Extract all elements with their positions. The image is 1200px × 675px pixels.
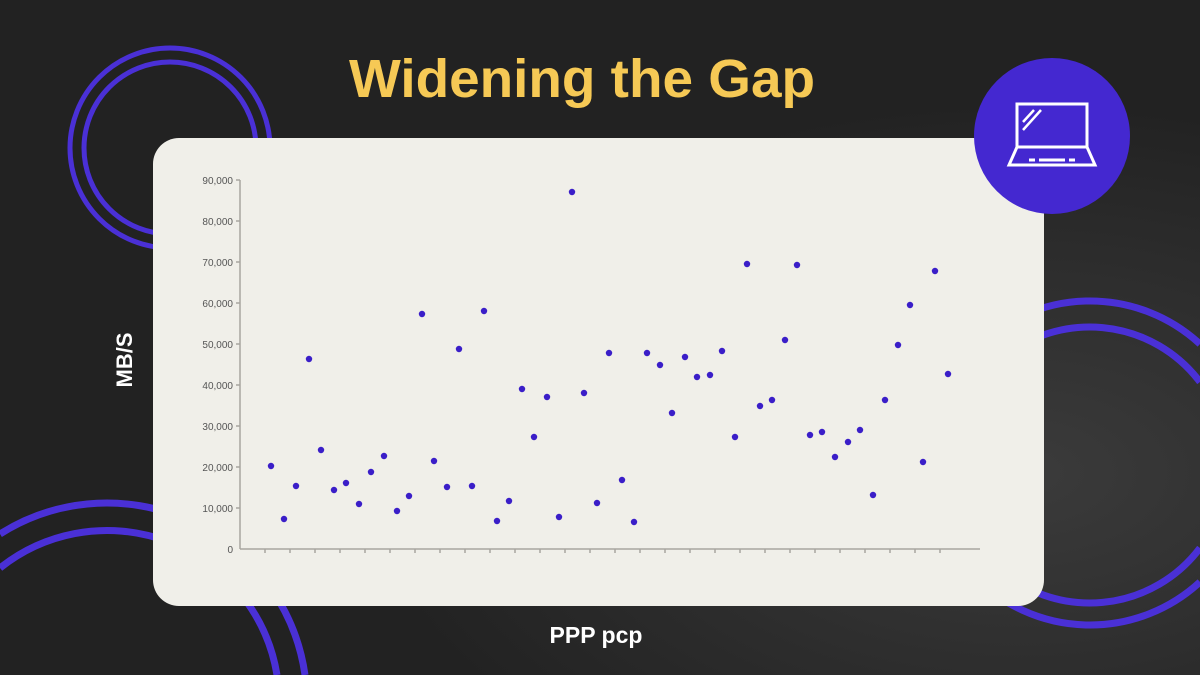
y axis label: MB/S [112, 332, 137, 388]
decorative rings: right [928, 301, 1200, 625]
scatter chart: 20,000 [202, 463, 233, 474]
decorative rings: bottom-left [0, 503, 305, 675]
title: Widening the Gap [349, 49, 815, 109]
scatter chart: 10,000 [202, 504, 233, 515]
scatter chart: 50,000 [202, 340, 233, 351]
icon: laptop badge [974, 58, 1130, 214]
scatter chart: 90,000 [202, 176, 233, 187]
scatter chart: 70,000 [202, 258, 233, 269]
panel: chart card [153, 138, 1044, 606]
scatter chart [202, 176, 980, 556]
x axis label: PPP pcp [550, 622, 642, 648]
scatter chart: 0 [227, 545, 233, 556]
scatter chart: 80,000 [202, 217, 233, 228]
decorative rings: top-left [70, 48, 270, 248]
scatter chart: 40,000 [202, 381, 233, 392]
scatter chart: 60,000 [202, 299, 233, 310]
scatter chart: 30,000 [202, 422, 233, 433]
